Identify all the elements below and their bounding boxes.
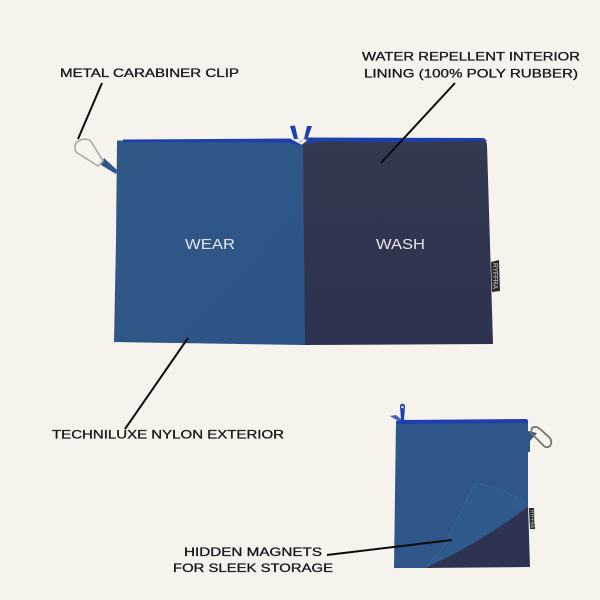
panel: navy lining corner: [425, 500, 530, 568]
label: hidden magnets: FOR SLEEK STORAGE: [173, 561, 333, 575]
panel: wash interior: [300, 138, 500, 345]
label: metal carabiner clip: METAL CARABINER CLIP: [60, 66, 239, 80]
zipper: wear side: [123, 138, 302, 146]
icon: metal carabiner clip: [75, 139, 117, 174]
tag: brand label: [491, 260, 500, 292]
label: hidden magnets: HIDDEN MAGNETS: [184, 545, 322, 559]
zipper: small pouch: [396, 419, 528, 424]
icon: small zipper pull: [390, 404, 405, 421]
arrow: lining line: [381, 83, 455, 163]
label: wear: WEAR: [185, 236, 235, 253]
tag: brand label: RYFFRA: [491, 263, 498, 289]
label: water repellent lining: LINING (100% POLY RUBBER): [364, 66, 578, 80]
arrow: magnets line: [327, 540, 452, 555]
label: techniluxe nylon exterior: TECHNILUXE NYLON EXTERIOR: [52, 428, 284, 442]
panel: blue exterior: [394, 420, 528, 568]
panel: fold flap: [425, 483, 527, 568]
arrow: carabiner line: [78, 83, 102, 139]
pouch: folded storage view: [390, 404, 551, 568]
zipper: wash side: [305, 138, 487, 144]
icon: small carabiner: [525, 427, 551, 452]
panel: wear exterior: [114, 138, 305, 345]
label: water repellent lining: WATER REPELLENT INTERIOR: [362, 50, 580, 64]
tag: small brand label: RYFFRA: [528, 510, 534, 529]
label: wash: WASH: [376, 236, 425, 253]
icon: zipper pulls: [290, 126, 312, 143]
arrow: nylon line: [125, 338, 188, 429]
pouch: open wear and wash panels: [75, 126, 500, 345]
